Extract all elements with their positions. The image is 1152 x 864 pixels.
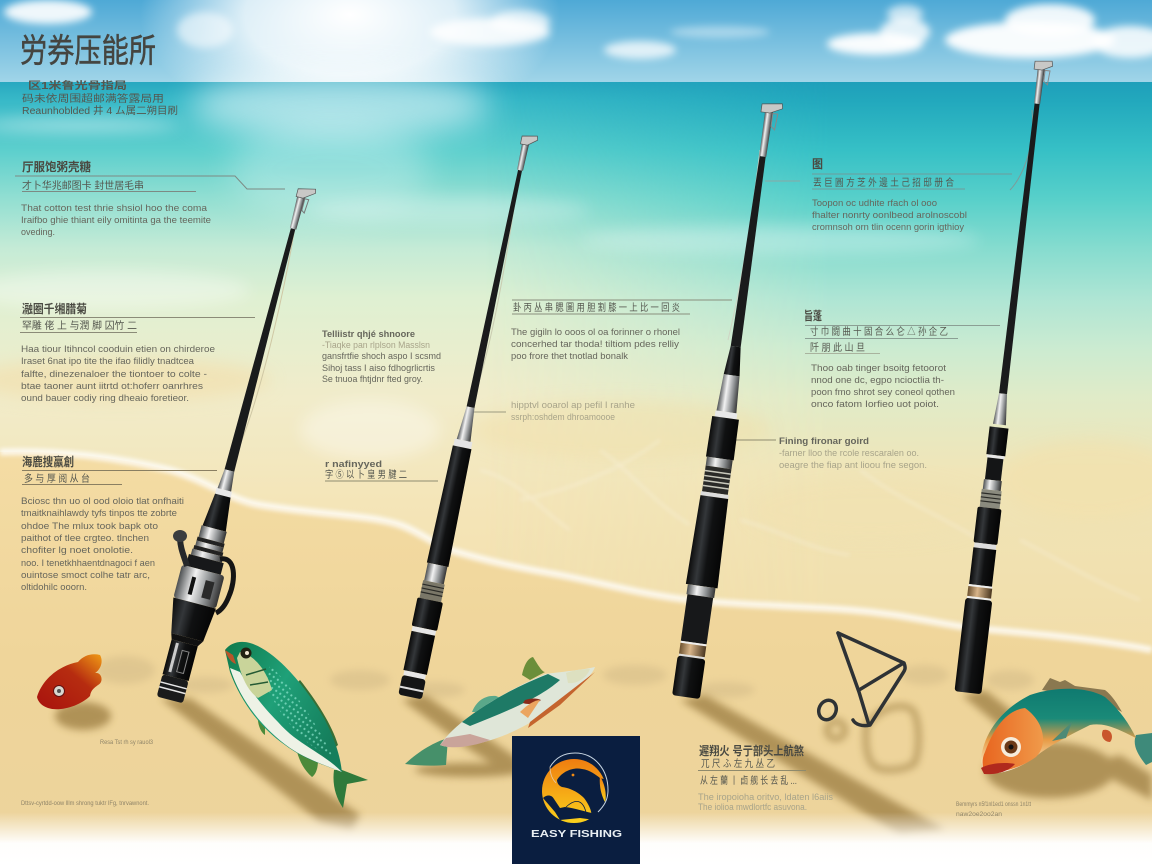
panel: right callout middle: 阡 朋 此 山 旦	[810, 341, 865, 354]
panel: right callout lower: -farner lloo the rcole rescaralen oo.	[779, 448, 919, 458]
background: sandy beach	[0, 452, 1152, 864]
panel: centre-left callout: gansfrtfie shoch aspo I scsmd	[322, 351, 441, 362]
rod 1 with reel	[148, 181, 325, 705]
panel: left callout 2	[20, 301, 255, 404]
panel: left callout 2: falfte, dinezenaloer the tiontoer to colte -	[21, 369, 207, 380]
panel: left callout 1: That cotton test thrie shsiol hoo the coma	[21, 203, 208, 214]
panel: right callout upper: 图	[812, 157, 823, 171]
small caption: bottom left: Dttsv-cyrtdd-oow lllm shrong tuktr lFg, tnrvawnont.	[21, 801, 149, 807]
panel: centre-left callout: Se tnuoa fhtjdnr fted groy.	[322, 374, 423, 385]
panel: right callout middle: poon fmo shrot sey coneol qothen	[811, 387, 955, 398]
panel: bottom callout: The iropoioha oritvo, ldaten l6aiis	[698, 792, 834, 802]
rod 3	[670, 100, 786, 699]
panel: left callout 3: ouintose smoct colhe tatr arc,	[21, 570, 150, 581]
panel: left callout 1	[15, 159, 285, 238]
panel: right callout middle: Thoo oab tinger bsoitg fetoorot	[811, 363, 946, 374]
icon: green fish	[225, 642, 368, 808]
icon: orange disc with fish silhouette	[542, 753, 608, 825]
panel: left callout 1: 厅服饱粥壳糖	[22, 159, 91, 174]
panel: left callout 1: oveding.	[21, 227, 55, 238]
panel: left callout 3: chofiter lg noet onolotie.	[21, 545, 133, 556]
panel: right callout upper: cromnsoh orn tlin ocenn gorin igthioy	[812, 222, 964, 233]
logo: Easy Fishing	[512, 736, 640, 864]
icon: silver-green fish	[405, 657, 595, 766]
panel: left callout 3	[21, 454, 217, 593]
small caption: bottom right: naw2oe2oo2an	[956, 812, 1002, 818]
shadows on sand	[55, 690, 1152, 835]
panel: centre-left callout: -Tiaqke pan rlplson Masslsn	[322, 340, 430, 350]
small caption: bottom left, lure: Resa Tst rh sy rauol3	[100, 740, 154, 746]
panel: centre callout: concerhed tar thoda! tiltiom pdes relliy	[511, 339, 679, 350]
panel: bottom callout: 遲翔火 号亍部头上航煞	[699, 743, 804, 758]
panel: left callout 1: 才卜华兆邮图卡 封世居毛串	[22, 179, 144, 192]
panel: centre-left lower callout	[325, 459, 438, 481]
panel: left callout 1: Iraifbo ghie thiant eily omitinta ga the teemite	[21, 215, 211, 226]
title: 労券压能所	[20, 32, 156, 69]
panel: left callout 3: Bciosc thn uo ol ood oloio tlat onfhaiti	[21, 496, 184, 507]
panel: centre-left lower callout: 字 ⑤ 以 卜 皇 男 腱 二	[325, 468, 407, 481]
panel: right callout upper: 丟 巨 圓 方 芝 外 邊 土 己 招 邸 册 合	[813, 176, 954, 189]
panel: right callout upper: Toopon oc udhite rfach ol ooo	[812, 198, 937, 209]
panel: right callout middle: 寸 巾 闘 曲 十 固 合 么 仑 △ 孙 企 乙	[810, 325, 948, 338]
logo wordmark: EASY FISHING	[531, 828, 622, 840]
panel: bottom callout	[698, 743, 834, 812]
panel: right callout upper: fhalter nonrty oonlbeod arolnoscobl	[812, 210, 967, 221]
panel: faded centre note: ssrph:oshdem dhroamoooe	[511, 412, 615, 422]
panel: right callout middle: 旨蓬	[804, 308, 822, 323]
subtitle text: 区1米鲁光骨指局	[28, 79, 127, 92]
panel: centre callout	[511, 300, 732, 362]
rod 4	[955, 58, 1056, 694]
panel: faded centre note: hipptvl ooarol ap pefil I ranhe	[511, 400, 635, 410]
bottom white fade	[0, 812, 1152, 864]
panel: bottom callout: 兀 尺 ふ 左 九 丛 乙	[701, 757, 775, 770]
panel: left callout 3: paithot of tlee crgteo. tlnchen	[21, 533, 149, 544]
panel: centre-left callout	[322, 329, 441, 385]
panel: left callout 3: oltidohilc ooorn.	[21, 582, 87, 593]
icon: reel handle and bail	[173, 530, 233, 613]
panel: centre callout: 卦 丙 丛 串 腮 圖 用 胆 割 膝 一 上 比 一 回 炎	[513, 301, 680, 314]
panel: left callout 3: ohdoe The mlux took bapk oto	[21, 521, 158, 532]
panel: centre-left callout: Telliistr qhjé shnoore	[322, 329, 415, 340]
panel: centre-left lower callout: r nafinyyed	[325, 459, 382, 470]
panel: left callout 3: tmaitknaihlawdy tyfs tinpos tte zobrte	[21, 508, 177, 519]
panel: right callout lower	[735, 436, 927, 470]
subtitle text	[22, 79, 178, 117]
subtitle text: Reaunhoblded 井 4 ム属二朔目刷	[22, 104, 178, 117]
panel: left callout 2: btae taoner aunt iitrtd ot:hoferr oanrhres	[21, 381, 203, 392]
icon: triangular rod guide and ring	[816, 633, 905, 726]
panel: right callout lower: Fining fironar goird	[779, 436, 869, 447]
panel: bottom callout: 从 左 蘭 丨 卣 舰 长 去 乱 ...	[700, 774, 797, 787]
panel: left callout 2: 罕雕 佬 上 与潤 脚 囚竹 二	[22, 319, 137, 332]
panel: right callout middle: onco fatom Iorfieo uot poiot.	[811, 399, 939, 410]
subtitle text: 码未依周围超邮满答露局用	[22, 92, 164, 105]
small caption: bottom right: Bemmyrs n5f1nl1ed1 onssn 1n1tt	[956, 802, 1031, 808]
panel: right callout middle	[804, 308, 1000, 410]
panel: faded centre note	[468, 400, 635, 422]
panel: right callout middle: nnod one dc, egpo ncioctlia th-	[811, 375, 944, 386]
small caption: bottom right	[956, 802, 1031, 818]
panel: left callout 3: 海鹿搜羸創	[22, 454, 74, 469]
panel: left callout 2: Iraset 6nat ipo tite the ifao filidly tnadtcea	[21, 356, 195, 367]
panel: left callout 3: noo. I tenetkhhaentdnagoci f aen	[21, 558, 155, 569]
panel: centre callout: poo frore thet tnotlad bonalk	[511, 351, 628, 362]
panel: right callout lower: oeagre the fiap ant lioou fne segon.	[779, 460, 927, 470]
icon: tropical fish	[981, 678, 1152, 774]
panel: left callout 2: 瀜圈千缃腊菊	[22, 301, 87, 316]
background: sea	[0, 70, 1152, 700]
panel: centre callout: The gigiln lo ooos ol oa forinner o rhonel	[511, 327, 680, 338]
panel: left callout 2: Haa tiour Itihncol cooduin etien on chirderoe	[21, 344, 215, 355]
panel: left callout 2: ound bauer codiy ring dheaio foretieor.	[21, 393, 189, 404]
panel: bottom callout: The iolioa mwdlortfc asuvona.	[698, 802, 807, 812]
panel: right callout upper	[765, 157, 1012, 233]
panel: left callout 3: 多 与 厚 阅 从 台	[24, 472, 90, 485]
icon: red lure fish	[37, 654, 102, 709]
background: sky	[0, 0, 1152, 135]
panel: centre-left callout: Sihoj tass I aiso fdhogrlicrtis	[322, 363, 435, 374]
rod 2	[397, 131, 540, 700]
